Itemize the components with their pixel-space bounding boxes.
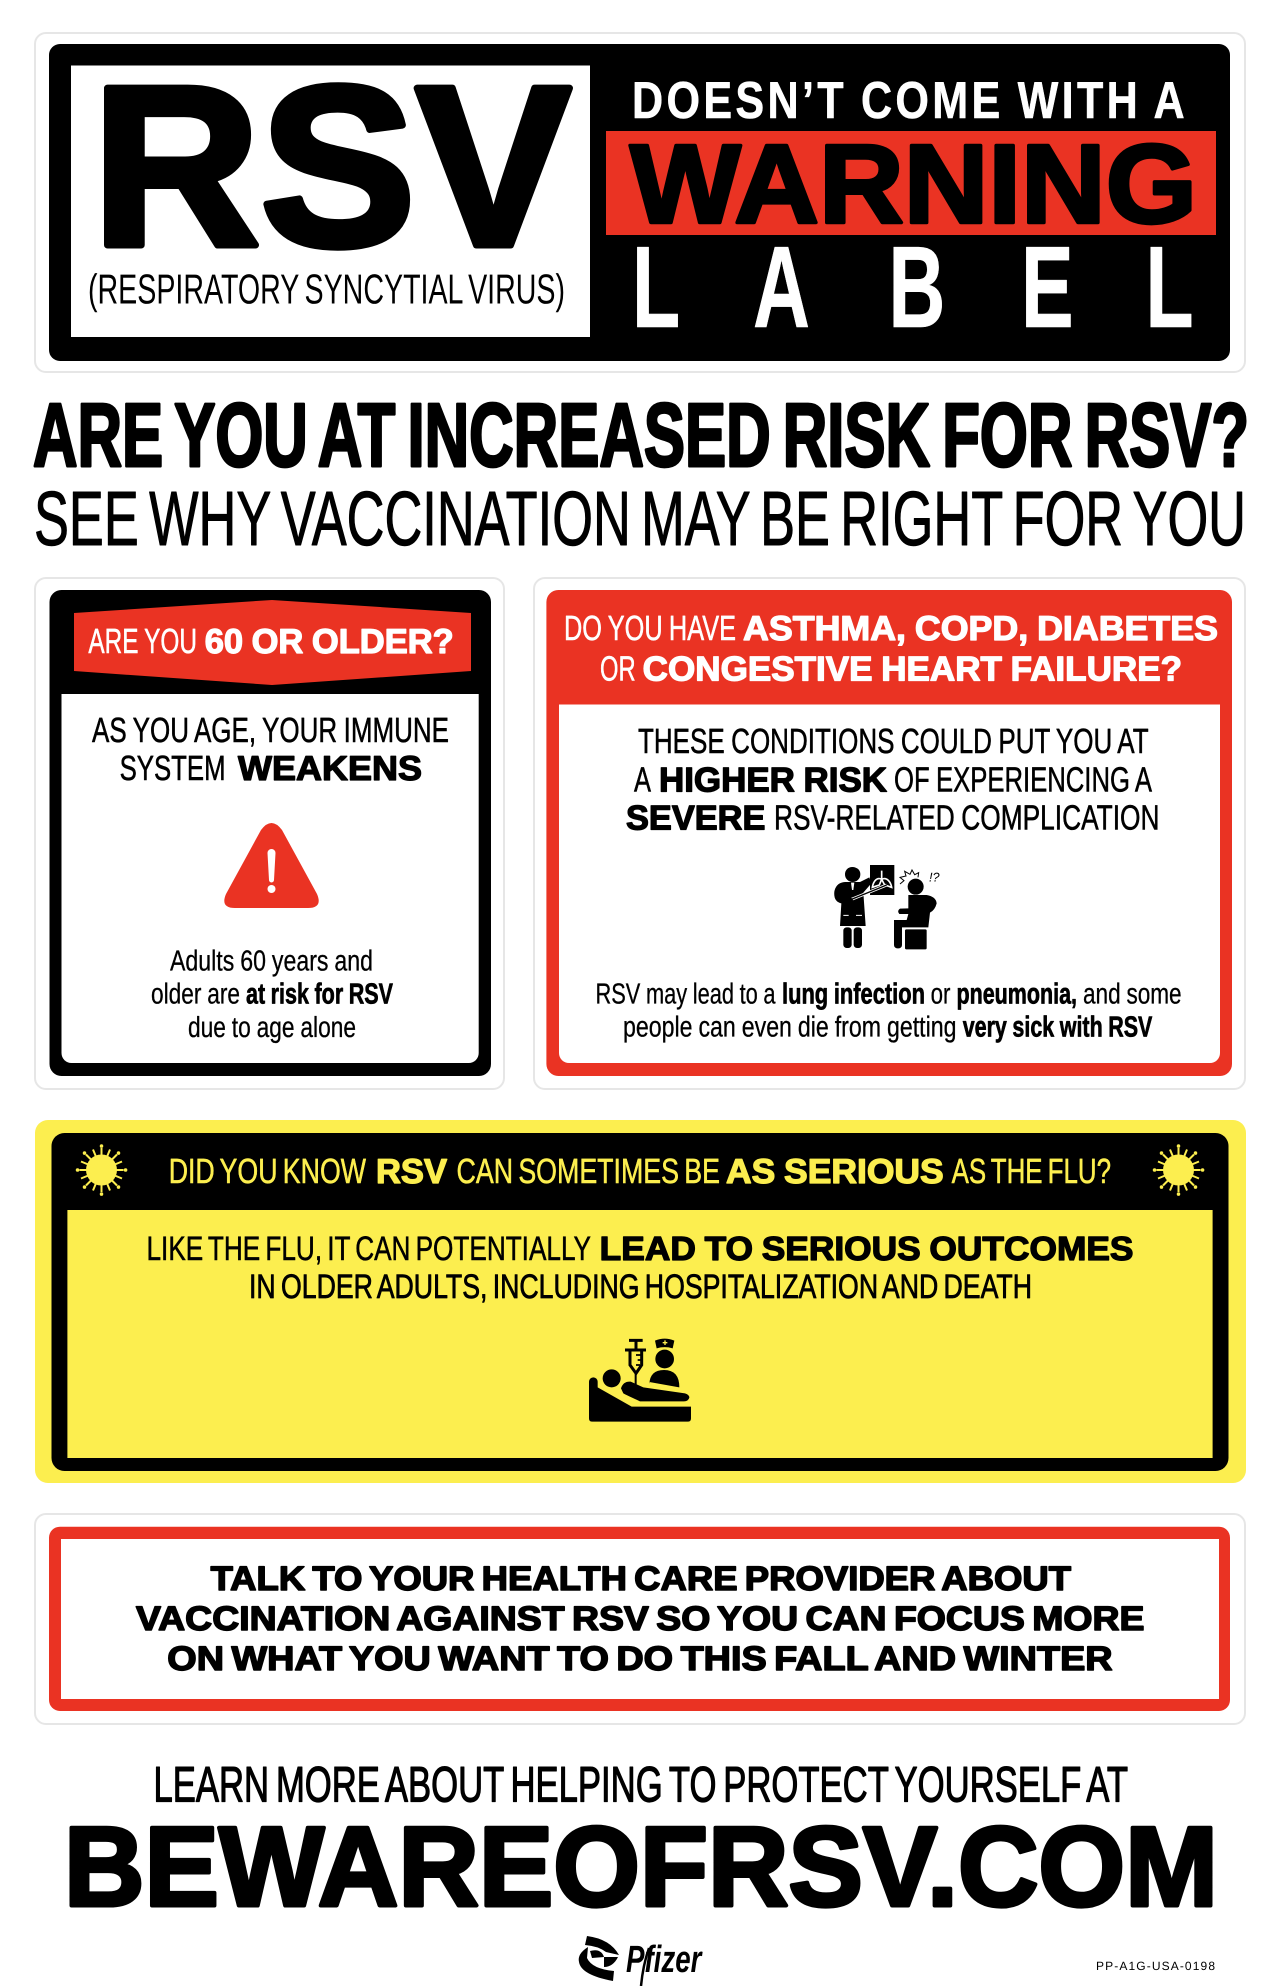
heading: did you know [169,1152,1111,1191]
heading: did you know: AS SERIOUS [726,1153,944,1191]
heading: did you know: AS THE FLU? [952,1152,1111,1191]
heading: do you have conditions: OR [600,650,636,688]
text: adults at risk: due to age alone [188,1012,356,1044]
heading: did you know: CAN SOMETIMES BE [456,1152,720,1191]
RSV name box: RSV [92,40,571,294]
icon: virus left [78,1146,126,1194]
text: serious outcomes: LIKE THE FLU, IT CAN POTENTIALLY [146,1230,591,1268]
text: higher risk: SEVERE [626,800,765,838]
text: call to action [136,1560,1144,1678]
text: adults at risk: at risk for RSV [246,979,393,1011]
text: immune system weakens: AS YOU AGE, YOUR IMMUNE [92,711,449,750]
text: adults at risk: older are [151,979,240,1011]
text: immune system weakens: WEAKENS [238,750,422,788]
text: higher risk: RSV-RELATED COMPLICATION [774,799,1160,838]
warning label tagline: WARNING [630,122,1197,246]
warning label tagline: LABEL [632,222,1194,352]
icon: patient in bed with nurse and syringe [589,1339,691,1422]
panel: 60 or older [35,578,504,1089]
text: lung infection or pneumonia: RSV may lead to a [596,978,776,1010]
text: lung infection or pneumonia: or [931,978,951,1010]
text: serious outcomes: LEAD TO SERIOUS OUTCOMES [600,1231,1134,1268]
logo: Pfizer: Pfizer [626,1939,703,1981]
heading: did you know: DID YOU KNOW [169,1152,366,1191]
text: call to action: VACCINATION AGAINST RSV SO YOU CAN FOCUS MORE [136,1600,1144,1638]
text: immune system weakens: SYSTEM [120,749,226,788]
text: call to action: ON WHAT YOU WANT TO DO THIS FALL AND WINTER [167,1640,1113,1678]
logo: Pfizer [579,1936,703,1986]
text: lung infection or pneumonia: pneumonia, [956,978,1077,1010]
heading: did you know: RSV [376,1153,447,1191]
panel: RSV warning label banner [35,33,1245,372]
red hexagon heading banner: ARE YOU [88,622,197,661]
text: higher risk [626,722,1160,838]
text: lung infection or pneumonia: lung infection [782,978,925,1010]
text: lung infection or pneumonia [596,978,1182,1044]
icon: virus right [1154,1146,1203,1194]
red hexagon heading banner: 60 OR OLDER? [205,623,454,661]
text: higher risk: HIGHER RISK [659,761,887,799]
heading: do you have conditions: ASTHMA, COPD, DIABETES [743,610,1218,648]
panel: chronic conditions [534,578,1245,1089]
icon: doctor showing lung x-ray to patient: !? [929,871,940,885]
warning label tagline [606,72,1216,352]
text: immune system weakens [92,711,449,788]
heading: do you have conditions: DO YOU HAVE [564,609,736,648]
text: document code: PP-A1G-USA-0198 [1096,1959,1215,1973]
text: serious outcomes: IN OLDER ADULTS, INCLUDING HOSPITALIZATION AND DEATH [249,1268,1032,1306]
text: serious outcomes [146,1230,1134,1306]
text: lung infection or pneumonia: and some [1083,978,1182,1010]
panel: talk to your health care provider [35,1514,1245,1724]
text: higher risk: A [634,760,651,799]
text: lung infection or pneumonia: very sick with RSV [963,1012,1153,1044]
RSV name box: (RESPIRATORY SYNCYTIAL VIRUS) [88,266,565,312]
heading: do you have conditions [564,609,1218,688]
heading: do you have conditions: CONGESTIVE HEART FAILURE? [643,650,1182,688]
text: lung infection or pneumonia: people can even die from getting [623,1012,956,1044]
text: website url: BEWAREOFRSV.COM [64,1804,1218,1930]
text: call to action: TALK TO YOUR HEALTH CARE PROVIDER ABOUT [211,1560,1071,1598]
text: higher risk: OF EXPERIENCING A [894,760,1152,799]
red hexagon heading banner [74,600,471,685]
text: adults at risk: Adults 60 years and [170,946,373,978]
text: adults at risk [151,946,393,1044]
heading: are you at increased risk [33,386,1249,562]
icon: warning triangle [224,823,319,908]
icon: doctor showing lung x-ray to patient [834,865,940,949]
panel: as serious as the flu [35,1120,1246,1483]
